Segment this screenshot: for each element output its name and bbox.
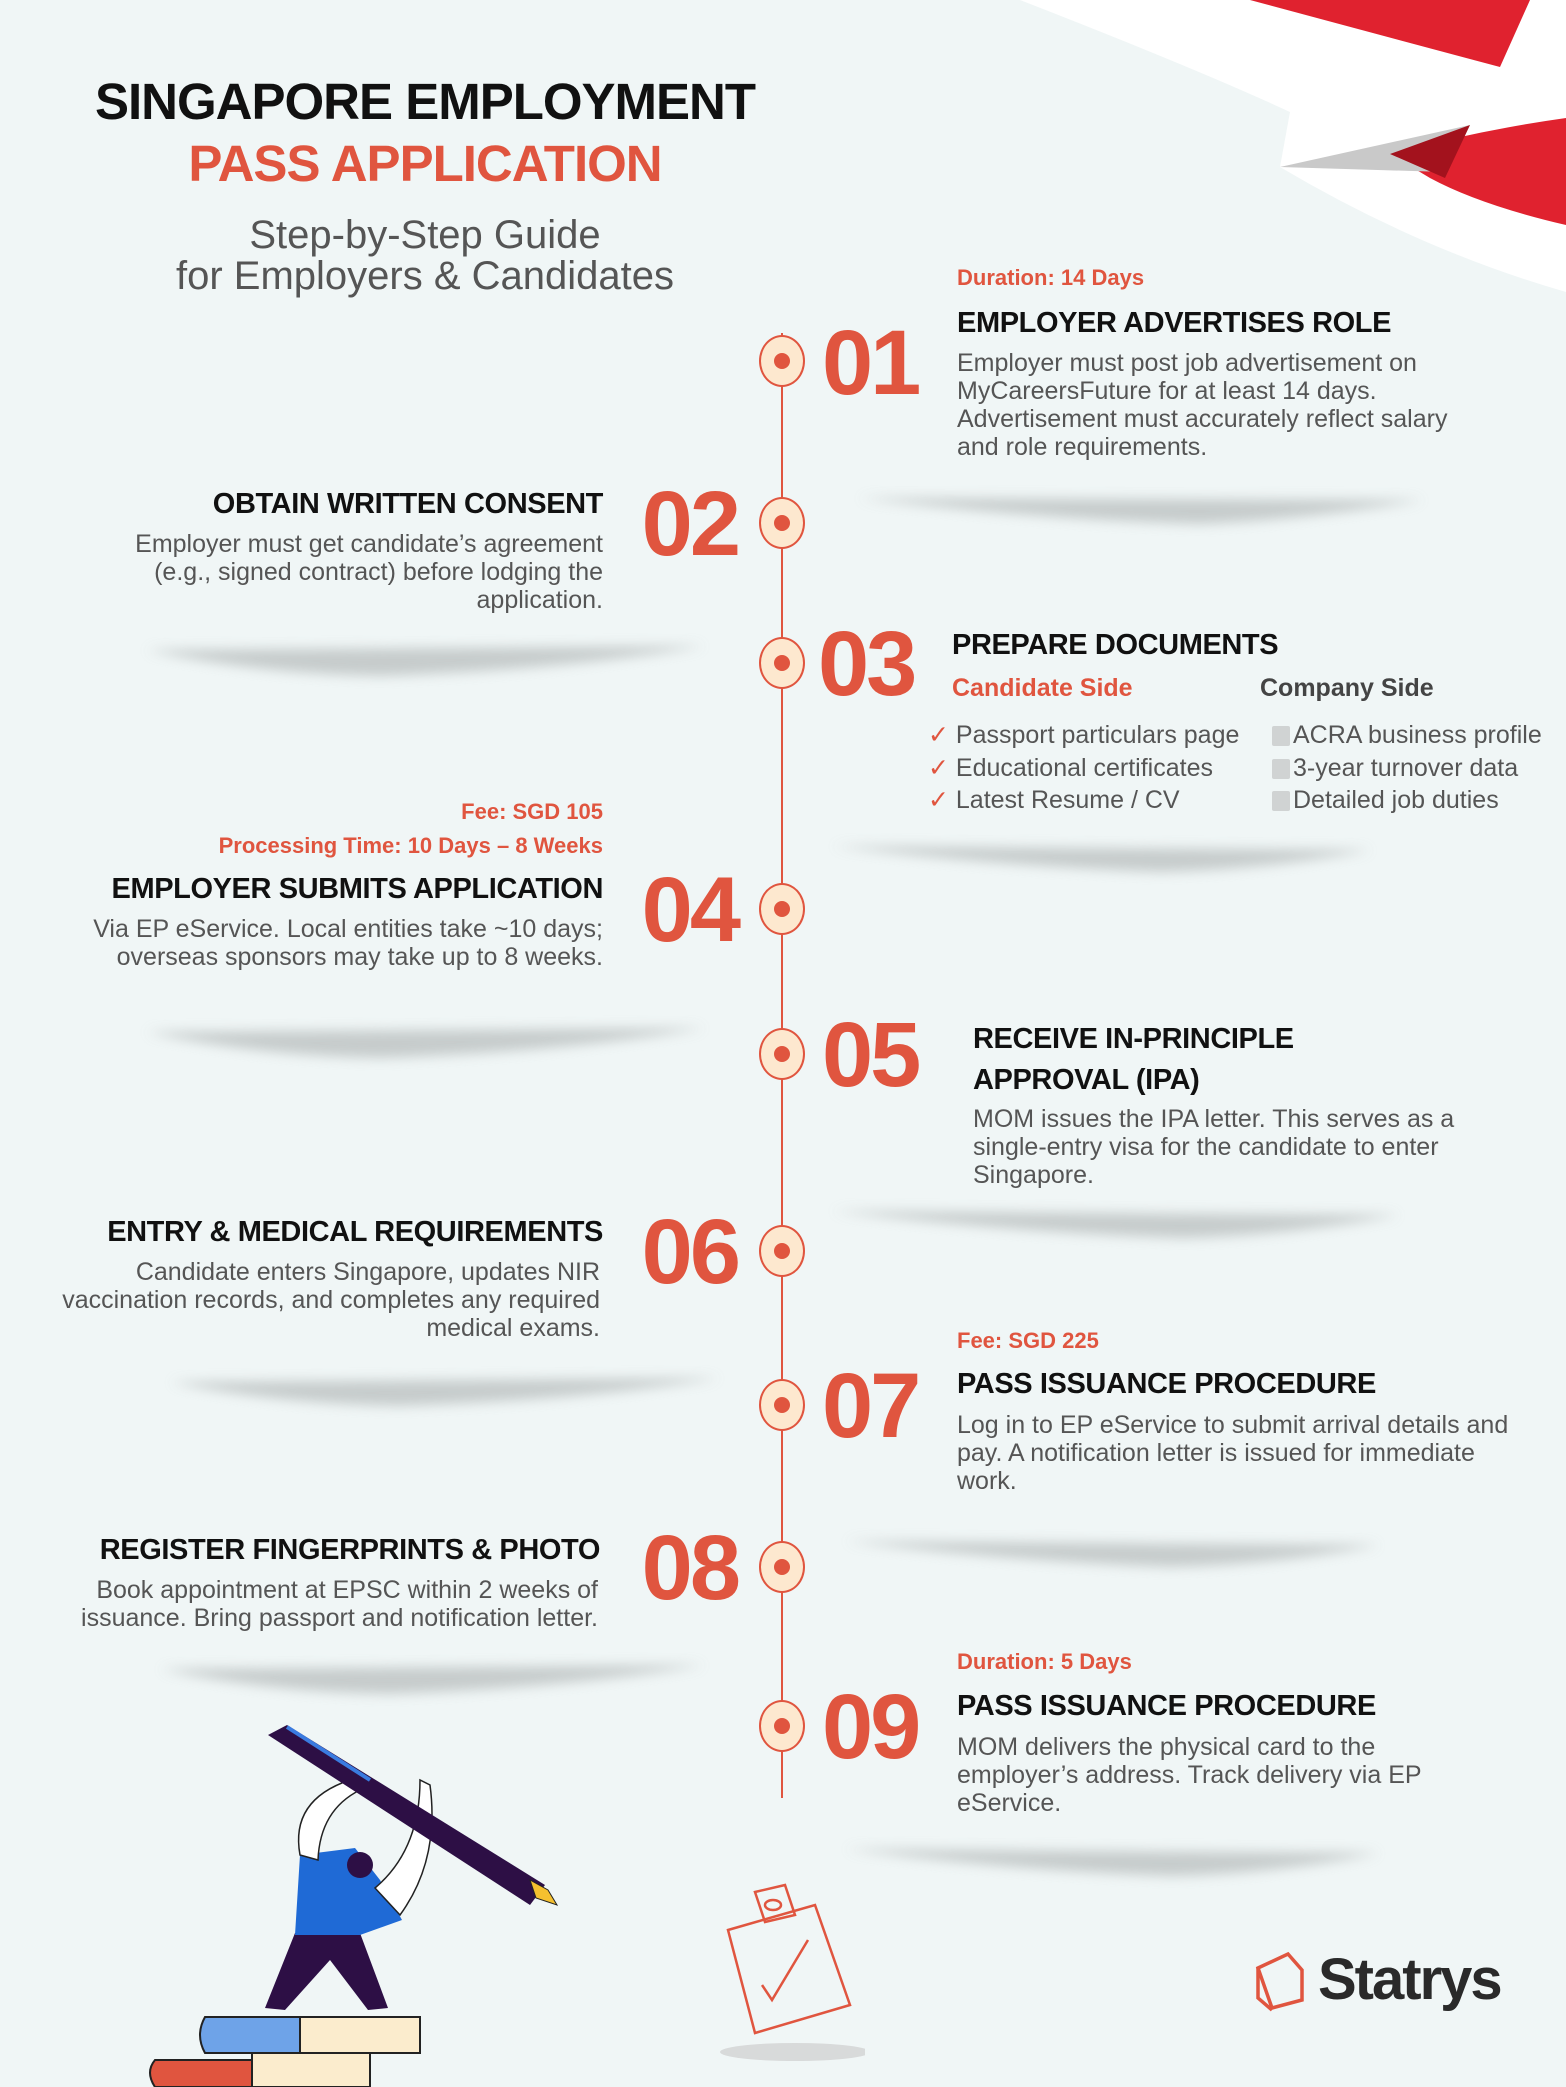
title: SINGAPORE EMPLOYMENT [95,73,755,130]
pen [268,1725,545,1905]
step 02: OBTAIN WRITTEN CONSENT [213,488,603,520]
step 09: eService. [957,1789,1061,1817]
subtitle [176,213,674,298]
step 04: 04 [642,859,738,961]
step 01: MyCareersFuture for at least 14 days. [957,377,1377,405]
step 05: RECEIVE IN-PRINCIPLE [973,1023,1294,1055]
step 01: Employer must post job advertisement on [957,349,1417,377]
step 08 [81,1517,738,1632]
step 07 [822,1328,1508,1495]
company side list: 3-year turnover data [1293,754,1518,782]
icon: clipboard [720,1884,865,2061]
body [295,1848,402,1935]
step 06: Candidate enters Singapore, updates NIR [136,1258,600,1286]
step 09: employer’s address. Track delivery via EP [957,1761,1422,1789]
company side list: ACRA business profile [1293,721,1542,749]
step 05: MOM issues the IPA letter. This serves as a [973,1105,1454,1133]
step 04: overseas sponsors may take up to 8 weeks. [117,943,603,971]
step 02: application. [477,586,603,614]
candidate side list: Candidate Side [952,674,1133,702]
step 05 [822,1004,1454,1189]
step 05: 05 [822,1004,918,1106]
step 07: Fee: SGD 225 [957,1328,1099,1353]
step 01: Advertisement must accurately reflect salary [957,405,1447,433]
step 04: Via EP eService. Local entities take ~10 days; [93,915,603,943]
step 02: 02 [642,473,738,575]
step 04: EMPLOYER SUBMITS APPLICATION [112,873,603,905]
step 03: PREPARE DOCUMENTS [952,629,1278,661]
step 01: and role requirements. [957,433,1207,461]
step 06: medical exams. [426,1314,600,1342]
step 02 [135,473,738,614]
subtitle: Step-by-Step Guide [249,213,601,257]
step 09: 09 [822,1676,918,1778]
step 01: 01 [822,312,918,414]
step 04: Processing Time: 10 Days – 8 Weeks [219,833,603,858]
logo: Statrys: Statrys [1318,1947,1501,2012]
step 07: pay. A notification letter is issued for immediate [957,1439,1475,1467]
candidate side list: ✓ Educational certificates [928,754,1213,782]
step 03: 03 [818,613,914,715]
step 08: 08 [642,1517,738,1619]
company side list: Detailed job duties [1293,786,1499,814]
candidate side list: ✓ Passport particulars page [928,721,1239,749]
title [95,73,756,192]
step 01: Duration: 14 Days [957,265,1144,290]
title: PASS APPLICATION [188,135,662,192]
candidate side list [928,674,1239,814]
step 05: single-entry visa for the candidate to enter [973,1133,1439,1161]
step 06 [62,1201,738,1342]
candidate side list: ✓ Latest Resume / CV [928,786,1180,814]
step 06: ENTRY & MEDICAL REQUIREMENTS [107,1216,603,1248]
step 09: Duration: 5 Days [957,1649,1132,1674]
step 09: PASS ISSUANCE PROCEDURE [957,1690,1376,1722]
step 03 [818,613,1542,814]
legs [265,1933,388,2010]
books [150,2060,260,2087]
step 08: REGISTER FINGERPRINTS & PHOTO [100,1534,600,1566]
illustration: person lifting pen on books [149,1725,558,2087]
head [347,1852,373,1878]
arms [299,1780,360,1860]
step 07: Log in to EP eService to submit arrival details and [957,1411,1508,1439]
timeline markers [759,335,805,1752]
step 05: APPROVAL (IPA) [973,1064,1199,1096]
subtitle: for Employers & Candidates [176,254,674,298]
step 07: work. [957,1467,1017,1495]
step 02: (e.g., signed contract) before lodging the [154,558,603,586]
step 08: issuance. Bring passport and notification letter. [81,1604,598,1632]
step 01 [822,265,1448,461]
step 08: Book appointment at EPSC within 2 weeks of [96,1576,598,1604]
step 06: 06 [642,1201,738,1303]
step 07: 07 [822,1355,918,1457]
step 05: Singapore. [973,1161,1094,1189]
step 06: vaccination records, and completes any required [62,1286,600,1314]
company side list [1260,674,1542,814]
company side list: Company Side [1260,674,1434,702]
step 04 [93,799,741,971]
step 07: PASS ISSUANCE PROCEDURE [957,1368,1376,1400]
step 01: EMPLOYER ADVERTISES ROLE [957,307,1391,339]
step 09 [822,1649,1422,1817]
step 09: MOM delivers the physical card to the [957,1733,1375,1761]
step 02: Employer must get candidate’s agreement [135,530,603,558]
step 04: Fee: SGD 105 [461,799,603,824]
